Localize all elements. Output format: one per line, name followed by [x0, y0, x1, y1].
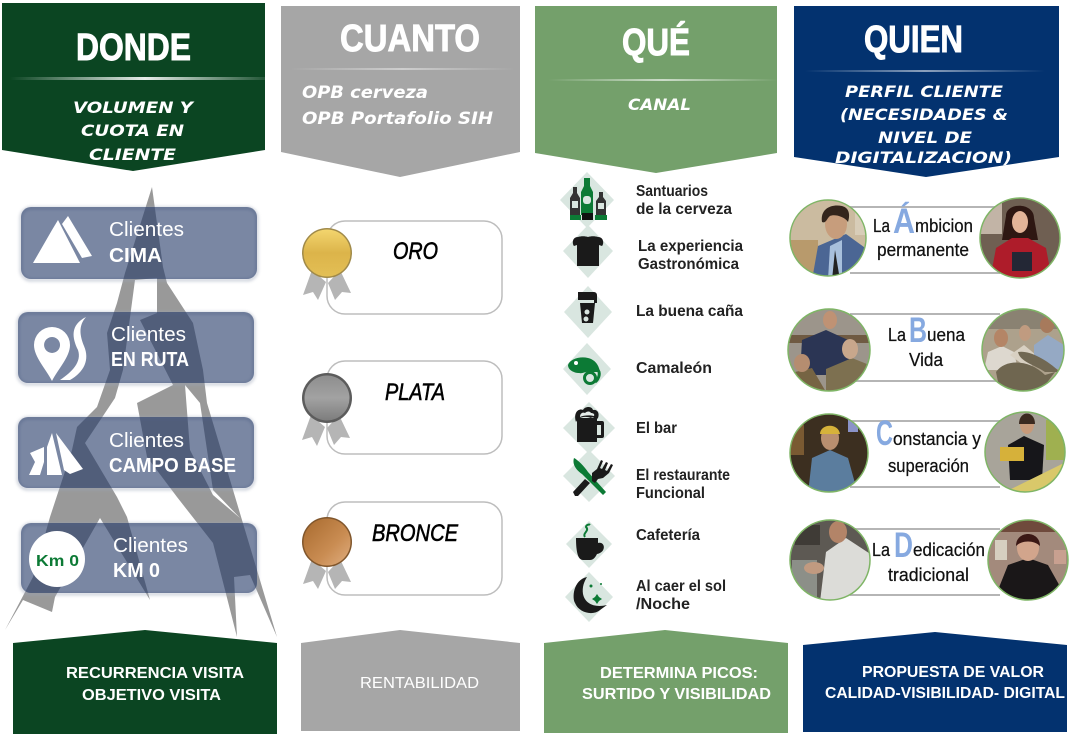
card text: km 0: Clientes — [113, 535, 188, 557]
icon: bronze medal — [302, 517, 352, 589]
icon: km 0 badge: Km 0 — [36, 553, 79, 570]
icon: mountains — [33, 216, 92, 263]
cuanto footer banner — [301, 630, 520, 731]
profile text: buena vida: La — [888, 324, 907, 345]
card text: en ruta: Clientes — [111, 324, 186, 346]
channel: la buena cana — [564, 286, 743, 338]
donde footer banner — [13, 630, 277, 734]
photo: woman with tray — [984, 410, 1066, 494]
donde header banner — [2, 3, 280, 171]
cuanto subtitle — [302, 83, 493, 129]
photo: man in white shirt — [790, 520, 870, 600]
icon: coffee cup — [566, 521, 612, 568]
icon: beer mug — [563, 402, 615, 454]
cuanto subtitle: OPB cerveza — [302, 83, 428, 103]
label: bronce: BRONCE — [372, 520, 459, 547]
profile text: ambicion: Á — [893, 201, 915, 241]
icon: silver medal — [302, 373, 352, 446]
mountain silhouette — [5, 187, 277, 637]
quien header banner — [794, 6, 1059, 177]
profile text: buena vida: B — [909, 311, 927, 350]
profile text: ambicion — [873, 201, 973, 260]
icon: knife and fork — [563, 450, 615, 502]
label: cafeteria: Cafetería — [636, 527, 700, 544]
label: al caer el sol — [636, 578, 726, 613]
photo: family group — [788, 309, 872, 392]
icon: beer glass — [564, 286, 612, 338]
channel: al caer el sol — [565, 572, 726, 622]
profile text: constancia: C — [876, 414, 893, 453]
heading: donde: DONDE — [76, 27, 191, 69]
panel: donde column — [2, 3, 280, 734]
channel: experiencia gastronomica — [563, 225, 743, 278]
label: santuarios — [636, 183, 732, 218]
profile text: ambicion: mbicion — [915, 215, 973, 236]
profile text: dedicacion — [872, 526, 985, 585]
card: clientes en ruta — [18, 312, 254, 384]
que footer banner: SURTIDO Y VISIBILIDAD — [582, 686, 771, 703]
label: el restaurante funcional: El restaurante — [636, 467, 730, 484]
donde footer banner: RECURRENCIA VISITA — [66, 665, 244, 682]
que header banner — [535, 6, 778, 173]
profile text: dedicacion: tradicional — [888, 564, 969, 585]
quien footer banner: PROPUESTA DE VALOR — [862, 664, 1044, 681]
panel: cuanto column — [281, 6, 520, 731]
heading: cuanto: CUANTO — [340, 18, 480, 60]
quien subtitle: NIVEL DE — [878, 128, 972, 147]
heading: quien: QUIEN — [864, 19, 963, 61]
channel: el bar — [563, 402, 677, 454]
photo: woman in black — [988, 520, 1068, 600]
label: camaleon: Camaleón — [636, 360, 712, 377]
label: la buena cana: La buena caña — [636, 303, 743, 320]
card text: cima: Clientes — [109, 219, 184, 241]
card: clientes km 0 — [21, 523, 257, 594]
profile text: dedicacion: La — [872, 539, 891, 560]
profile: constancia y superacion — [788, 410, 1066, 494]
tier: plata — [302, 361, 502, 454]
icon: chameleon — [563, 343, 611, 395]
label: experiencia gastronomica — [638, 238, 743, 273]
donde subtitle: CUOTA EN — [81, 121, 185, 140]
profile text: buena vida: uena — [927, 324, 966, 345]
cuanto header banner — [281, 6, 520, 177]
tier: bronce — [302, 502, 502, 595]
donde subtitle: VOLUMEN Y — [73, 98, 195, 117]
channel: el restaurante funcional — [563, 450, 730, 502]
photo: family with boar — [982, 309, 1064, 392]
profile text: ambicion: permanente — [877, 239, 969, 260]
profile text: constancia — [876, 414, 982, 476]
label: santuarios: Santuarios — [636, 183, 708, 200]
panel: quien column — [788, 6, 1069, 732]
channel: cafeteria — [566, 521, 700, 568]
icon: km 0 badge — [29, 531, 85, 587]
card text: cima: CIMA — [109, 245, 162, 267]
donde footer banner: OBJETIVO VISITA — [82, 687, 221, 704]
quien subtitle: DIGITALIZACION) — [835, 148, 1012, 167]
card text: km 0: KM 0 — [113, 560, 160, 582]
label: oro: ORO — [393, 238, 438, 265]
label: el restaurante funcional: Funcional — [636, 485, 705, 502]
donde subtitle: CLIENTE — [89, 145, 176, 164]
photo: man with yellow hat — [790, 414, 868, 492]
panel: que column — [535, 6, 788, 733]
donde subtitle — [73, 98, 195, 164]
label: al caer el sol: /Noche — [636, 596, 690, 613]
profile text: dedicacion: edicación — [913, 539, 985, 560]
label: experiencia gastronomica: La experiencia — [638, 238, 743, 255]
que footer banner — [544, 630, 788, 733]
profile: la buena vida — [788, 309, 1064, 392]
icon: bottles — [560, 172, 614, 228]
profile text: buena vida — [888, 311, 966, 370]
que subtitle: CANAL — [628, 95, 691, 114]
channel: santuarios — [560, 172, 732, 228]
profile: la dedicacion tradicional — [788, 518, 1069, 602]
card text: campo base: Clientes — [109, 430, 184, 452]
icon: road pin — [34, 317, 86, 381]
icon: gold medal — [302, 228, 352, 300]
quien subtitle — [835, 82, 1012, 167]
card text: en ruta: EN RUTA — [111, 349, 189, 371]
label: santuarios: de la cerveza — [636, 201, 732, 218]
profile text: constancia: superación — [888, 455, 969, 476]
quien footer banner — [803, 632, 1067, 732]
photo: woman in red — [980, 198, 1060, 280]
card text: campo base — [109, 430, 236, 477]
profile text: ambicion: La — [873, 215, 891, 236]
quien footer banner: CALIDAD-VISIBILIDAD- DIGITAL — [825, 685, 1065, 702]
label: plata: PLATA — [385, 379, 445, 406]
quien subtitle: PERFIL CLIENTE — [845, 82, 1003, 101]
profile text: buena vida: Vida — [909, 349, 944, 370]
tier: oro — [302, 221, 502, 314]
card: clientes campo base — [18, 417, 254, 489]
que footer banner: DETERMINA PICOS: — [600, 665, 758, 682]
card text: cima — [109, 219, 184, 267]
heading: que: QUÉ — [622, 20, 690, 64]
icon: tent — [29, 433, 83, 475]
cuanto subtitle: OPB Portafolio SIH — [302, 109, 493, 129]
card: clientes cima — [21, 207, 257, 280]
card text: km 0 — [113, 535, 188, 582]
label: experiencia gastronomica: Gastronómica — [638, 256, 739, 273]
photo: man in blue suit — [790, 200, 866, 276]
label: el bar: El bar — [636, 420, 677, 437]
quien subtitle: (NECESIDADES & — [840, 105, 1008, 124]
profile text: constancia: onstancia y — [893, 428, 982, 449]
icon: moon and stars — [565, 572, 613, 622]
card text: en ruta — [111, 324, 189, 371]
profile text: dedicacion: D — [894, 526, 913, 565]
label: el restaurante funcional — [636, 467, 730, 502]
channel: camaleon — [563, 343, 712, 395]
label: al caer el sol: Al caer el sol — [636, 578, 726, 595]
card text: campo base: CAMPO BASE — [109, 455, 236, 477]
profile: la ambicion permanente — [788, 198, 1060, 280]
cuanto footer banner: RENTABILIDAD — [360, 675, 479, 692]
icon: chef jacket — [563, 225, 613, 278]
